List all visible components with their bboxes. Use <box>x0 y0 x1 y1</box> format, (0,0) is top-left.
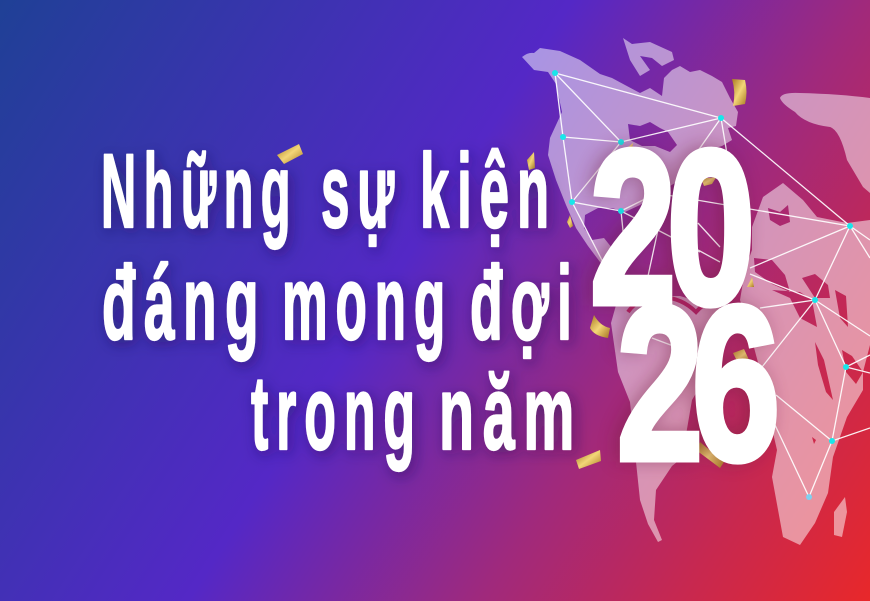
title line 2 <box>102 245 580 362</box>
confetti pieces <box>277 144 303 164</box>
year 2026 <box>590 106 780 506</box>
gold confetti <box>277 79 754 469</box>
title line 2: đáng <box>102 245 267 362</box>
title line 1: sự <box>321 133 402 250</box>
world map <box>522 38 870 545</box>
title line 2: mong <box>282 245 453 362</box>
map: south america <box>611 296 726 542</box>
title line 1: Những <box>101 133 298 250</box>
title line 3: năm <box>439 355 583 472</box>
title line 3: trong <box>251 355 423 472</box>
dark arc shadow above 26 <box>628 297 732 312</box>
digits 26: 6 <box>692 262 780 506</box>
digits 20: 2 <box>590 106 676 350</box>
title: kiện <box>420 133 557 250</box>
map: arctic islands <box>623 38 674 76</box>
year shadow: 2 <box>613 261 701 505</box>
year shadow: 0 <box>662 105 750 349</box>
digits 26: 2 <box>617 262 703 506</box>
title line 2: đợi <box>470 245 580 362</box>
network nodes <box>552 70 853 500</box>
map: greenland shape <box>780 93 870 193</box>
digits 20: 0 <box>667 106 755 350</box>
network lines <box>555 73 870 497</box>
year shadow <box>586 105 775 505</box>
title <box>101 133 583 472</box>
map: north america <box>522 48 738 272</box>
year shadow: 2 <box>586 105 674 349</box>
map: madagascar <box>834 497 847 537</box>
map: europe and africa <box>740 183 870 545</box>
year shadow: 6 <box>687 261 775 505</box>
